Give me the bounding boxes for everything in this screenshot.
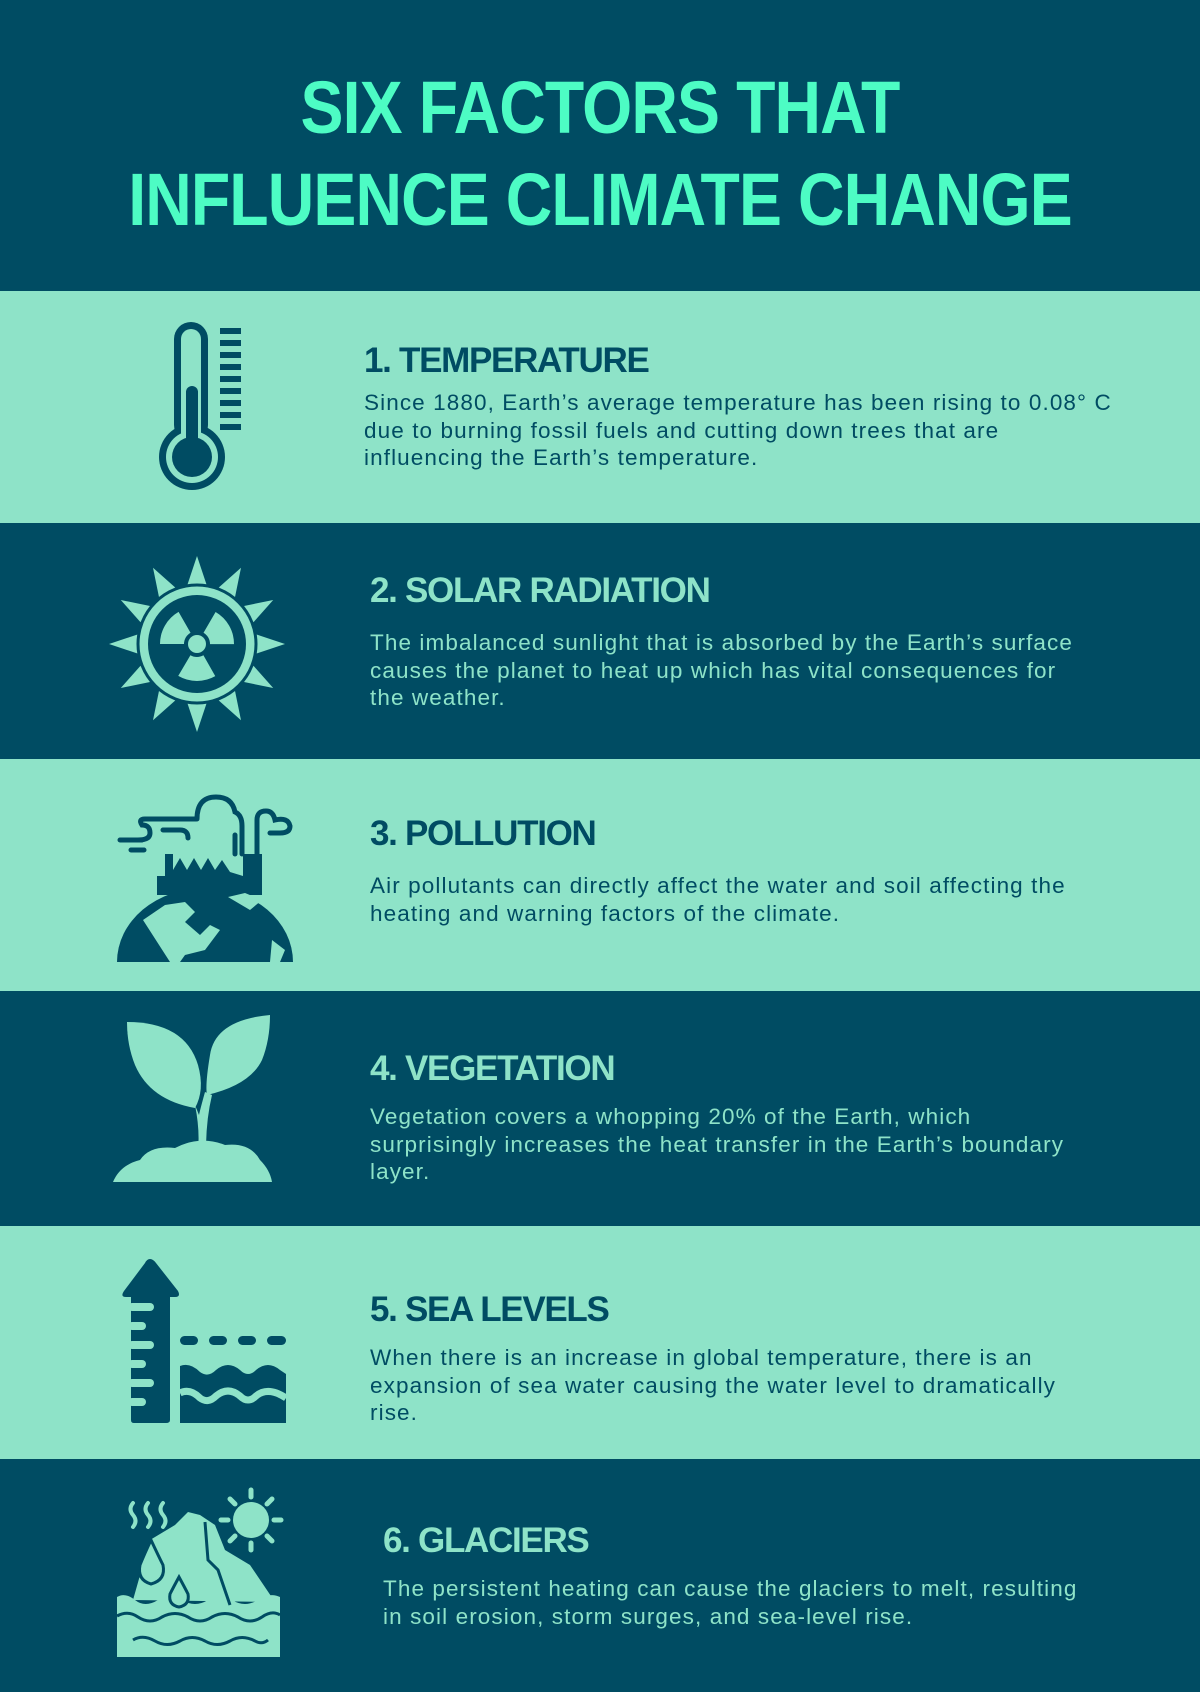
text: vegetation: surprisingly increases the heat transfer in the Earth’s boundary (370, 1132, 1064, 1156)
text: glaciers (383, 1521, 1078, 1628)
text: sea levels: rise. (370, 1400, 418, 1425)
header (0, 0, 1200, 291)
icon: rising sea level (122, 1259, 286, 1423)
text: glaciers: in soil erosion, storm surges, and sea-level rise. (383, 1604, 913, 1628)
text: vegetation: layer. (370, 1159, 430, 1184)
panel: sea levels (0, 1226, 1200, 1459)
icon: sprout (113, 1015, 272, 1182)
icon: thermometer (159, 322, 241, 490)
text: vegetation (370, 1049, 1064, 1184)
text: sea levels: expansion of sea water causing the water level to dramatically (370, 1372, 1056, 1398)
text: temperature: influencing the Earth’s temperature. (364, 445, 758, 470)
text: temperature: Since 1880, Earth’s average temperature has been rising to 0.08° C (364, 390, 1112, 415)
text: solar radiation (370, 571, 1073, 710)
text: pollution: Air pollutants can directly affect the water and soil affecting the (370, 873, 1066, 898)
text: pollution: 3. POLLUTION (370, 814, 596, 853)
panel: solar radiation (0, 523, 1200, 759)
text: sea levels: When there is an increase in global temperature, there is an (370, 1345, 1033, 1370)
text: temperature (364, 341, 1112, 470)
text: vegetation: 4. VEGETATION (370, 1049, 614, 1088)
text: pollution (370, 814, 1066, 926)
text: solar radiation: The imbalanced sunlight that is absorbed by the Earth’s surface (370, 630, 1073, 655)
text: solar radiation: the weather. (370, 685, 506, 710)
text: solar radiation: 2. SOLAR RADIATION (370, 571, 710, 610)
text: sea levels (370, 1290, 1056, 1425)
panel: temperature (0, 291, 1200, 523)
icon: polluted earth (117, 794, 293, 962)
text: glaciers: 6. GLACIERS (383, 1521, 588, 1560)
text: temperature: due to burning fossil fuels and cutting down trees that are (364, 418, 999, 442)
title: SIX FACTORS THAT (301, 66, 899, 149)
icon: sun radiation (109, 556, 285, 732)
text: sea levels: 5. SEA LEVELS (370, 1290, 609, 1329)
title: INFLUENCE CLIMATE CHANGE (128, 158, 1072, 241)
panel: vegetation (0, 991, 1200, 1226)
panel: glaciers (0, 1459, 1200, 1692)
text: glaciers: The persistent heating can cause the glaciers to melt, resulting (383, 1576, 1078, 1601)
title (128, 66, 1072, 241)
icon: melting glacier (117, 1488, 284, 1657)
text: vegetation: Vegetation covers a whopping 20% of the Earth, which (370, 1104, 971, 1129)
text: temperature: 1. TEMPERATURE (364, 341, 649, 380)
text: solar radiation: causes the planet to heat up which has vital consequences for (370, 658, 1056, 682)
panel: pollution (0, 759, 1200, 991)
text: pollution: heating and warning factors of the climate. (370, 900, 840, 926)
